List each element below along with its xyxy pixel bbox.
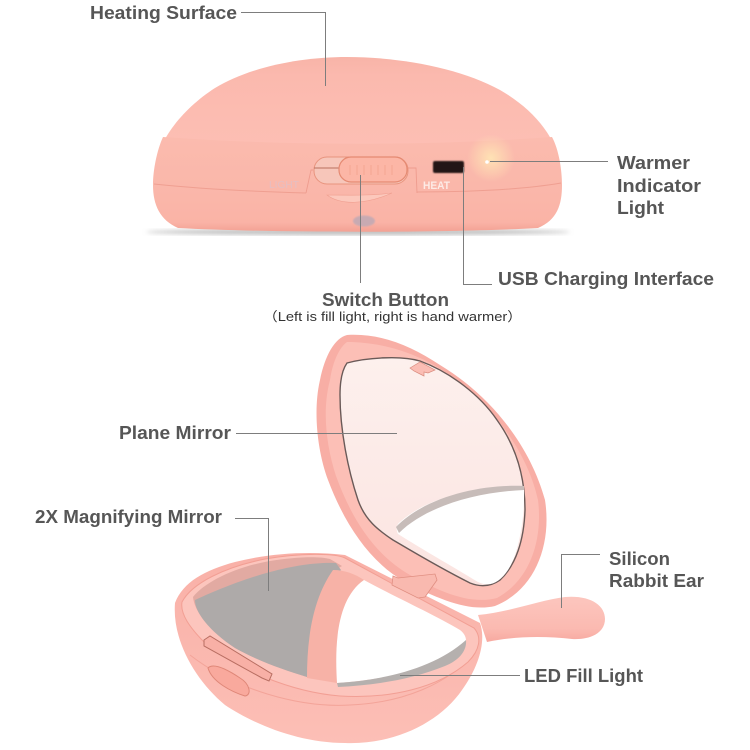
label: warmer indicator light: Warmer bbox=[617, 153, 690, 173]
buttons bbox=[204, 636, 272, 681]
rim pink strip bbox=[193, 557, 342, 677]
label: heating surface: Heating Surface bbox=[90, 3, 237, 23]
mirror gray strip bbox=[396, 486, 524, 533]
plane mirror bbox=[340, 358, 525, 586]
warmer indicator glow bbox=[467, 134, 515, 182]
magnifying mirror dark bbox=[195, 563, 341, 677]
base rim bbox=[182, 554, 479, 696]
label: switch button: Switch Button bbox=[322, 290, 449, 310]
leader: rabbit ear bbox=[562, 554, 600, 608]
shadow bbox=[146, 229, 570, 235]
dome: heating surface bbox=[160, 57, 556, 150]
label: silicon rabbit ear: Silicon bbox=[609, 549, 670, 569]
leader: warmer indicator bbox=[490, 160, 608, 162]
lid frame bbox=[317, 335, 547, 608]
side band bbox=[153, 137, 562, 232]
label: silicon rabbit ear: Rabbit Ear bbox=[609, 571, 704, 591]
switch button bbox=[339, 157, 407, 182]
USB port bbox=[433, 161, 464, 173]
label: LED fill light: LED Fill Light bbox=[524, 666, 643, 686]
mirror white reflection bbox=[397, 488, 524, 584]
label: 2X magnifying mirror: 2X Magnifying Mirror bbox=[35, 507, 222, 527]
label: silicon rabbit ear bbox=[609, 549, 704, 591]
label: plane mirror: Plane Mirror bbox=[119, 423, 231, 443]
leader: switch bbox=[360, 175, 362, 283]
leader: 2X mirror bbox=[235, 518, 268, 591]
label LIGHT: LIGHT bbox=[269, 180, 299, 191]
label: warmer indicator light: Indicator bbox=[617, 176, 701, 196]
reflected lid bbox=[307, 570, 364, 683]
magnifying mirror white reflection bbox=[336, 580, 466, 683]
label HEAT: HEAT bbox=[423, 180, 450, 192]
latch mark bbox=[327, 193, 392, 202]
label: switch button bbox=[263, 290, 522, 324]
leader: LED fill light bbox=[400, 674, 520, 676]
blue logo bbox=[353, 216, 375, 226]
leader: heating surface bbox=[241, 12, 326, 86]
label: warmer indicator light: Light bbox=[617, 198, 664, 218]
rabbit ear bbox=[478, 597, 605, 642]
product: open compact mirror bbox=[175, 335, 605, 743]
hinge bbox=[392, 574, 437, 598]
note: switch modes: （Left is fill light, right is hand warmer） bbox=[263, 309, 522, 324]
label: warmer indicator light bbox=[617, 153, 701, 218]
switch recess bbox=[306, 168, 417, 193]
lower gray strip bbox=[337, 640, 466, 687]
leader: plane mirror bbox=[236, 432, 397, 434]
top latch bbox=[410, 362, 435, 376]
label: USB charging interface: USB Charging Interface bbox=[498, 269, 714, 289]
product: closed hand warmer bbox=[146, 57, 570, 235]
base shell bbox=[175, 553, 482, 743]
leader: USB bbox=[464, 167, 492, 284]
